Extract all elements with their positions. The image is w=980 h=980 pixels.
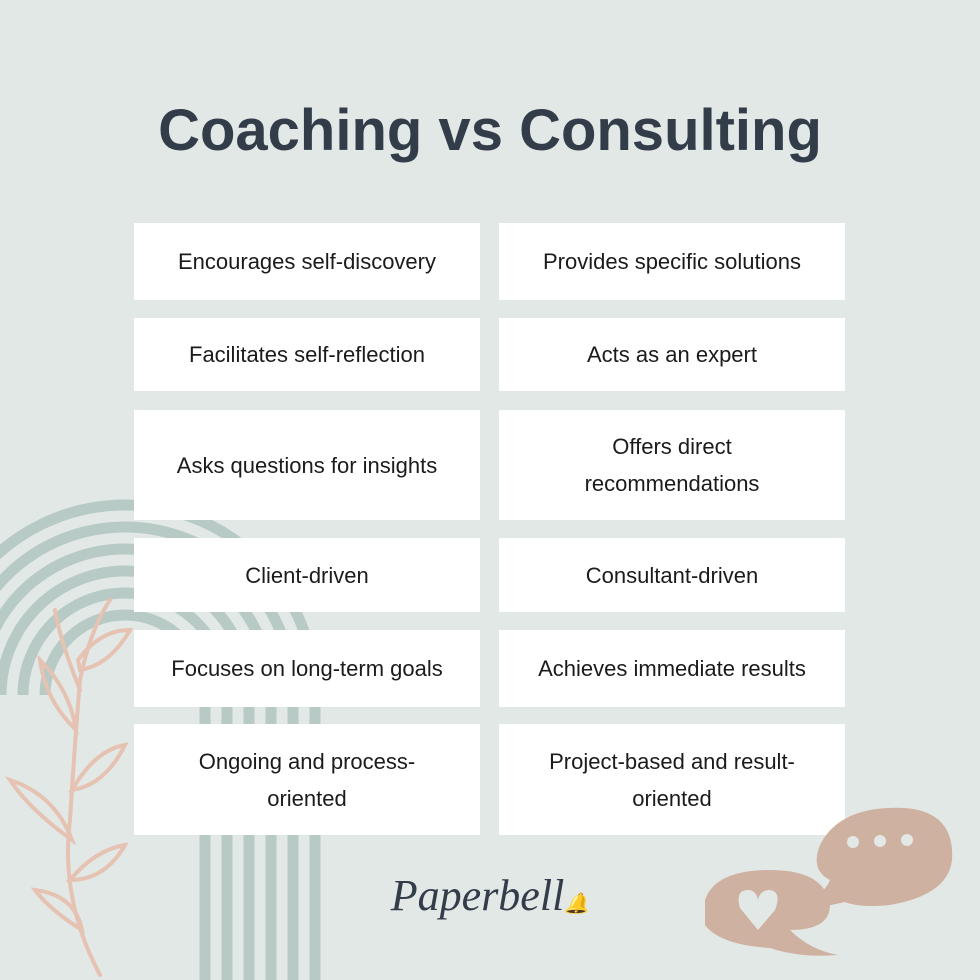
row 2 left: Facilitates self-reflection [189,342,425,367]
row 4 right: Consultant-driven [586,562,758,588]
logo: Paperbell🔔 [391,871,589,920]
row 2 left [134,318,480,391]
row 1 right [499,223,845,300]
row 2 right [499,318,845,391]
row 3 right: recommendations [585,471,759,496]
icon: speech bubbles [705,808,952,956]
row 5 right: Achieves immediate results [538,656,806,681]
row 4 left: Client-driven [245,562,369,588]
row 6 right [499,724,845,835]
title: Coaching vs Consulting [158,98,822,163]
row 3 right: Offers direct [612,434,732,459]
row 3 left: Asks questions for insights [177,452,437,478]
row 6 left: oriented [267,786,347,810]
row 3 right [499,410,845,520]
row 1 right: Provides specific solutions [543,249,801,274]
row 6 right: Project-based and result- [549,748,795,774]
row 6 right: oriented [632,786,712,810]
row 6 left [134,724,480,835]
row 1 left [134,223,480,300]
row 5 left [134,630,480,707]
row 4 left [134,538,480,612]
row 5 right [499,630,845,707]
row 5 left: Focuses on long-term goals [171,656,443,681]
row 4 right [499,538,845,612]
row 1 left: Encourages self-discovery [178,249,436,274]
row 3 left [134,410,480,520]
row 2 right: Acts as an expert [587,342,757,367]
row 6 left: Ongoing and process- [199,748,415,774]
